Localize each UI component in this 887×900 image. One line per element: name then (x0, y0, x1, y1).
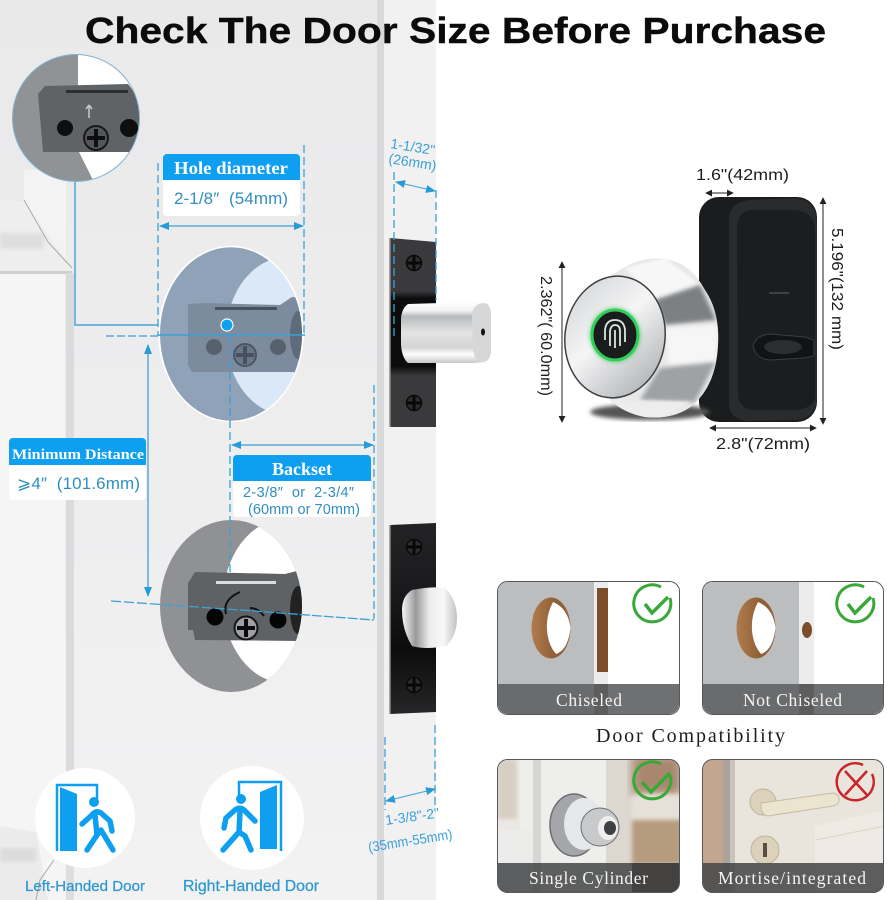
label: backset: Backset (272, 459, 332, 479)
fingerprint sensor (590, 308, 640, 362)
leader line from magnifier to hole (75, 180, 221, 325)
icon: right-handed door (200, 766, 304, 870)
card: mortise integrated: Mortise/integrated (718, 868, 866, 888)
dimension: 2.8 inch (710, 428, 816, 453)
card: chiseled (497, 581, 680, 715)
title: Check The Door Size Before Purchase (85, 10, 826, 51)
dimension: 2.8 inch: 2.8"(72mm) (716, 436, 810, 453)
bottom thickness dimension: (35mm-55mm) (367, 826, 453, 855)
top thickness dimension (388, 135, 438, 340)
backset and minimum distance lines (111, 345, 374, 620)
right-handed door label: Right-Handed Door (183, 878, 319, 895)
left-handed door label: Left-Handed Door (25, 878, 145, 895)
label: backset: 2-3/8″ or 2-3/4″ (243, 485, 354, 501)
bottom thickness dimension (367, 725, 453, 855)
deadbolt faceplate (390, 238, 436, 427)
product: fingerprint lock (557, 197, 817, 422)
knob body (603, 258, 718, 420)
card: not chiseled (702, 581, 884, 715)
label: hole diameter (163, 154, 300, 216)
card: mortise integrated (702, 759, 884, 893)
deadbolt (401, 302, 491, 363)
label: backset (233, 455, 371, 518)
dimension: 1.6 inch: 1.6"(42mm) (696, 167, 789, 184)
keypad back plate (699, 197, 817, 422)
label: minimum distance (9, 438, 146, 500)
label: hole diameter: Hole diameter (174, 158, 288, 178)
card: single cylinder: Single Cylinder (529, 868, 648, 888)
bottom thickness dimension: 1-3/8"-2" (384, 805, 440, 828)
label: minimum distance: Minimum Distance (12, 447, 144, 463)
hole 1: upper bore (158, 246, 304, 422)
card: single cylinder (497, 755, 682, 893)
label: minimum distance: ⩾4″ (101.6mm) (17, 474, 140, 493)
knob face (557, 270, 673, 404)
icon: check (634, 585, 671, 622)
center dot (221, 319, 233, 331)
icon: check (634, 762, 671, 799)
dimension: 5.196 inch: 5.196"(132 mm) (828, 228, 845, 350)
label: backset: (60mm or 70mm) (248, 502, 360, 518)
spring latch (402, 587, 457, 648)
heading: door compatibility: Door Compatibility (596, 725, 785, 747)
card: chiseled: Chiseled (556, 690, 622, 710)
label: hole diameter: 2-1/8″ (54mm) (174, 189, 288, 208)
latch faceplate (390, 523, 436, 714)
card: not chiseled: Not Chiseled (743, 690, 842, 710)
magnifier: latch detail (12, 54, 140, 182)
dimension: 1.6 inch (696, 167, 789, 193)
icon: check (837, 585, 874, 622)
top thickness dimension: (26mm) (388, 150, 438, 174)
hole diameter dimension lines (106, 145, 305, 575)
icon: cross (837, 763, 874, 800)
icon: left-handed door (35, 768, 135, 868)
dimension: 2.362 inch: 2.362"( 60.0mm) (537, 276, 554, 396)
knob shadow (590, 404, 710, 420)
hole 2: lower bore (160, 520, 302, 692)
top thickness dimension: 1-1/32" (390, 135, 436, 158)
